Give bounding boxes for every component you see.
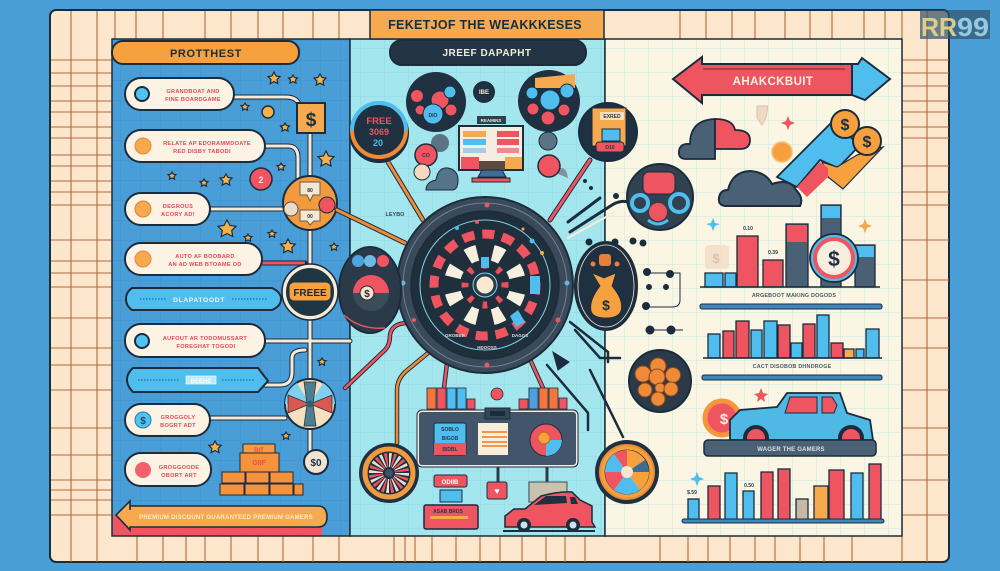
orange hub with chat bubbles: 80 (307, 188, 313, 194)
icon: dollar coins: $ (841, 117, 850, 134)
star: red (754, 388, 768, 402)
free badge hub: FREEE (293, 288, 327, 299)
magnifier: folder badge: D10 (605, 145, 615, 151)
car caption bar (704, 440, 876, 456)
left oval badge: $ (364, 289, 370, 300)
divider bar 2 (702, 375, 882, 380)
bottom arrow banner (113, 501, 327, 535)
money bag oval (575, 242, 637, 330)
icon: blue car with coin: $ (720, 411, 729, 428)
list item 3: DEGROUS (163, 204, 193, 210)
cluster: right token circle (518, 70, 580, 132)
blue bar: speech (127, 368, 268, 392)
sub heading pill: JREEF DAPAPHT (442, 48, 532, 59)
magnifier: free badge: 20 (373, 138, 383, 148)
title banner: FEKETJOF THE WEAKKKESES (388, 18, 582, 32)
icon: red token (250, 168, 272, 190)
small dark badge (473, 81, 495, 103)
dashboard panel: SOBLO (441, 427, 459, 433)
coin cluster circle (629, 350, 691, 412)
list item 7: GROGGOODE (159, 465, 199, 471)
icon: blue car with coin (705, 393, 873, 451)
blue accent pads (481, 257, 540, 327)
orange hub with chat bubbles (283, 176, 337, 230)
prize wheel hub (285, 379, 335, 429)
ring: outer pads (431, 231, 539, 339)
board labels (445, 333, 528, 350)
icon: dollar sign box: $ (306, 110, 317, 131)
cluster: left token circle: DIO (429, 113, 438, 119)
car caption bar: WAGER THE GAMERS (757, 447, 825, 453)
list item 2: RELATE AP EDORAMMDOATE (163, 141, 251, 147)
bar chart 3: $.59 (687, 490, 697, 496)
circuit traces (386, 180, 683, 334)
icon: dollar sign box (297, 103, 325, 133)
list item 1: FINE BOARDGAME (165, 97, 221, 103)
monitor: REAMINS (481, 118, 501, 123)
small heart tag (487, 467, 567, 502)
pale marker (757, 106, 768, 125)
blue bar: speech: BEEHE (191, 379, 211, 385)
bar chart 2 (703, 315, 882, 370)
list item 3: ACORY AD! (161, 212, 195, 218)
cluster: left token circle (406, 72, 466, 132)
cloud: lower dark (719, 171, 801, 206)
bar chart 1 (700, 205, 880, 299)
wedges: cream (445, 245, 525, 325)
ribbon arrow: heading: AHAKCKBUIT (733, 76, 813, 88)
bottom arrow banner: PREMIUM DISCOUNT GUARANTEED PREMIUM GAMERS (139, 515, 313, 521)
list item 6 (125, 404, 210, 436)
board labels: GROBBB (445, 333, 466, 338)
sparkle: cyan (690, 472, 704, 486)
stars scatter (168, 72, 338, 453)
sparkles (706, 218, 872, 233)
list item 5: FOREGHAT TOGODI (176, 344, 236, 350)
wheel: left (359, 443, 419, 503)
ring: inner pads (463, 263, 507, 307)
watermark logo (920, 10, 990, 42)
dashboard panel (417, 408, 578, 467)
small bubbles and clouds, left: CO (422, 153, 430, 159)
token gears circle (627, 164, 693, 230)
magnifier: free badge: FREE (366, 116, 392, 127)
bar chart 1: 0.10 (743, 226, 753, 232)
watermark logo: RR (921, 12, 957, 42)
list item 1: GRANDBOAT AND (166, 89, 220, 95)
stacked gold bars (220, 444, 303, 495)
magnifier: free badge (350, 103, 408, 162)
circuit traces: LEYBO (386, 212, 405, 218)
chip stacks (427, 388, 567, 409)
sub heading pill (390, 40, 586, 65)
rising arrow chart (777, 122, 883, 197)
icon: orange coin (772, 142, 792, 162)
main connectors (337, 160, 628, 443)
bar chart 1: $ (828, 248, 840, 271)
stacked gold bars: GIIF (252, 460, 267, 467)
icon: red token: 2 (258, 175, 264, 185)
list item 2: RED DISBY TABODI (173, 149, 231, 155)
cash register (424, 475, 478, 529)
connectors: left column links (210, 97, 350, 452)
bar chart 3: 0.50 (744, 483, 754, 489)
stacked gold bars: BIT (254, 448, 264, 454)
bullseye (473, 273, 497, 297)
small coin label (304, 450, 328, 474)
blue bar: display (126, 288, 281, 310)
monitor (459, 116, 523, 182)
small bubbles, right (538, 132, 568, 178)
title banner (370, 10, 604, 39)
orange hub with chat bubbles: 00 (307, 214, 313, 220)
left header pill: PROTTHEST (170, 48, 242, 60)
watermark logo: 99 (957, 12, 989, 42)
list item 7 (125, 453, 211, 486)
list item 4 (125, 243, 262, 275)
cash register: ODIIB (442, 480, 459, 486)
panel: right cream column (605, 39, 902, 536)
left oval badge (339, 247, 401, 333)
small bubbles and clouds, left (414, 134, 458, 190)
dashboard panel: BIGOB (442, 436, 459, 442)
panel: middle cyan column (350, 39, 605, 536)
list item 4: AUTO AF BOOBARD (175, 254, 235, 260)
sparkle: red (781, 116, 795, 130)
ribbon arrow: heading (673, 57, 890, 103)
blue bar: display: DLAPATOODT (173, 297, 225, 304)
list item 6: GROGGOLY (161, 415, 195, 421)
bar chart 1: 0.39 (768, 250, 778, 256)
cash register: ASAB BRDS (433, 509, 464, 515)
list item 5 (125, 324, 265, 357)
dart board (397, 197, 573, 373)
list item 3 (125, 193, 210, 225)
dashboard panel: BIDBL (442, 447, 458, 453)
list item 5: AUFOUT AR TODOMUSSART (163, 336, 247, 342)
free badge hub (282, 264, 338, 320)
board labels: DAGGS (512, 333, 528, 338)
rim studs (400, 202, 570, 368)
icon: dollar coins: $ (863, 134, 872, 151)
magnifier: folder badge (579, 103, 637, 161)
board labels: HDOOSS (477, 345, 497, 350)
magnifier: free badge: 3069 (369, 127, 389, 137)
money bag oval: $ (602, 297, 610, 313)
divider bar 1 (700, 304, 882, 309)
small coin label: $0 (310, 458, 322, 469)
list item 4: AN AD WEB BTOAME OD (168, 262, 242, 268)
icon: small coin (262, 106, 274, 118)
small heart tag: ♥ (494, 486, 500, 496)
left header pill (112, 41, 299, 64)
icon: red car (503, 492, 595, 532)
magnifier: folder badge: EXRED (603, 114, 621, 120)
panel: left blue column (112, 39, 350, 536)
bar chart 3 (682, 464, 884, 523)
wheel: right (595, 440, 659, 504)
small dark badge: IBE (479, 90, 489, 96)
cloud: dark and red (679, 119, 750, 159)
list item 7: OBORT ART (161, 473, 197, 479)
bar chart 1: ARGEBOOT MAKING DOGODS (752, 293, 836, 299)
bar chart 1: $ (712, 251, 720, 266)
list item 6: $ (140, 416, 146, 427)
list item 2 (125, 130, 265, 162)
list item 6: BOGRT ADT (160, 423, 196, 429)
icon: dollar coins (831, 110, 881, 155)
bar chart 2: CACT DISOBOB DHNDROGE (753, 364, 832, 370)
list item 1 (125, 78, 234, 110)
